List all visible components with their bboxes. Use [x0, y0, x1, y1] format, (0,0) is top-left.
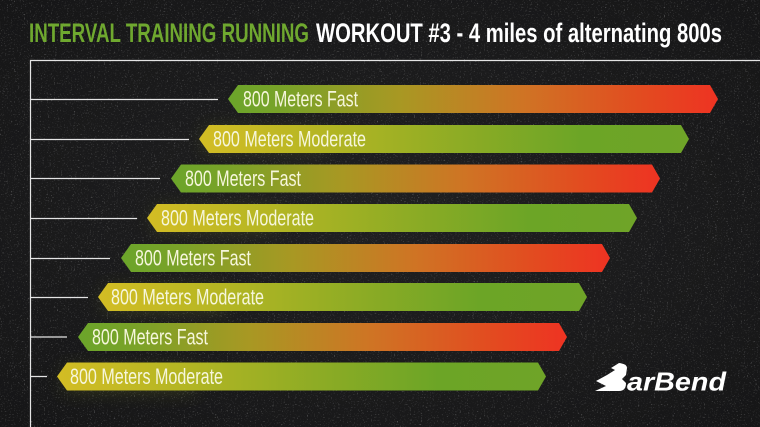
title: [29, 18, 722, 48]
bar 6 label: 800 Meters Moderate: [111, 284, 264, 310]
bar 5 label: 800 Meters Fast: [135, 246, 251, 270]
logo wordmark: arBend: [627, 366, 727, 396]
bar glow: [65, 130, 325, 390]
bar 6: moderate: [98, 283, 587, 311]
bar 8 label: 800 Meters Moderate: [70, 364, 223, 389]
logo: BarBend: [595, 363, 727, 396]
title: green part: INTERVAL TRAINING RUNNING: [29, 18, 309, 48]
bar 2: moderate: [199, 125, 689, 153]
bar 4: moderate: [147, 204, 637, 232]
bar 3: fast: [171, 164, 660, 192]
bar 4 label: 800 Meters Moderate: [161, 206, 314, 230]
bar 2 label: 800 Meters Moderate: [213, 126, 366, 152]
bar 1: fast: [228, 85, 718, 113]
bar 5: fast: [121, 244, 610, 272]
bar 3 label: 800 Meters Fast: [185, 166, 301, 191]
logo icon: [595, 363, 627, 391]
bar 7: fast: [78, 323, 567, 351]
bar 1 label: 800 Meters Fast: [243, 86, 358, 112]
bar 7 label: 800 Meters Fast: [92, 324, 208, 350]
bar 8: moderate: [57, 362, 546, 390]
